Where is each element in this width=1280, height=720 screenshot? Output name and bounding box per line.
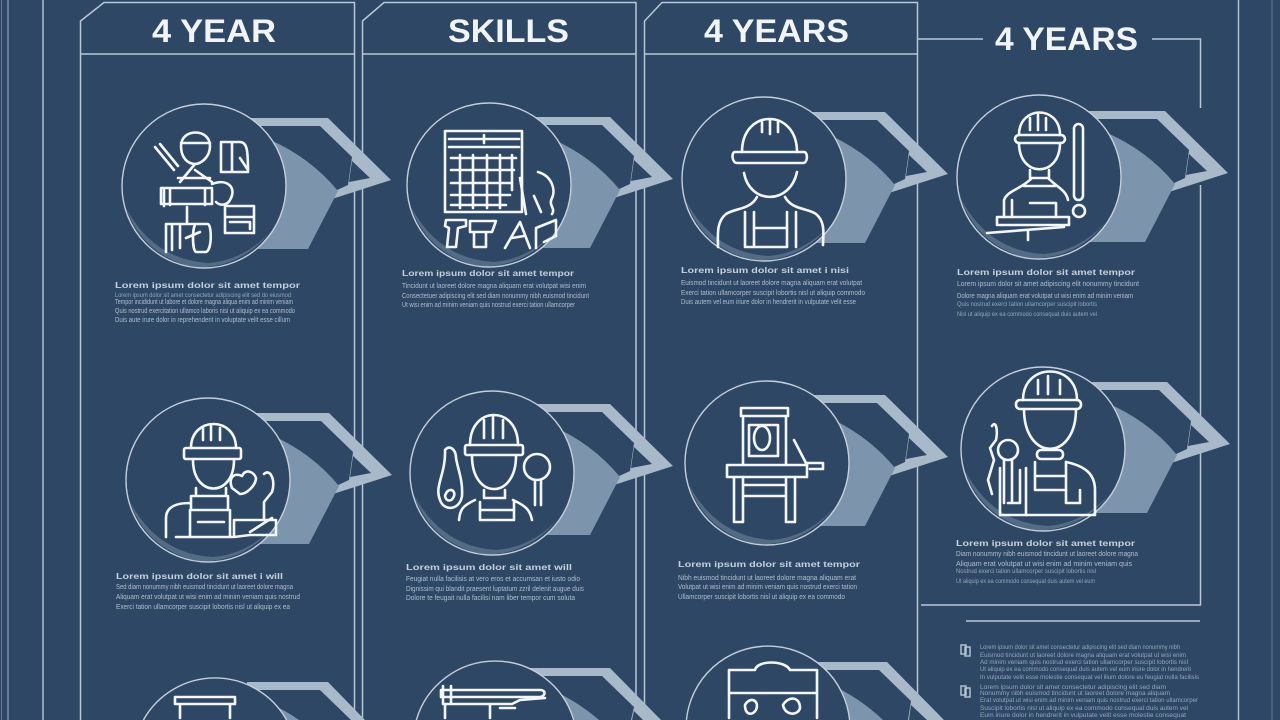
note 1 text xyxy=(980,645,1199,681)
step: column 4 row 1 xyxy=(957,95,1228,318)
circle xyxy=(126,398,290,562)
text block: Lorem ipsum dolor sit amet tempor xyxy=(678,560,860,569)
icon: note 1 xyxy=(961,645,970,656)
text block: Sed diam nonummy nibh euismod tincidunt ut laoreet dolore magna xyxy=(116,584,293,591)
text block xyxy=(406,563,584,602)
text block: Exerci tation ullamcorper suscipit lobortis nisl ut aliquip commodo xyxy=(681,290,865,297)
icon: workbench with machine xyxy=(727,408,823,522)
note 2 text xyxy=(980,685,1198,719)
arrow xyxy=(804,112,948,243)
note 2 text: Erat volutpat ut wisi enim ad minim veniam quis nostrud exerci tation ullamcorper xyxy=(980,698,1198,704)
step: column 3 row 1 xyxy=(681,97,948,306)
text block: Lorem ipsum dolor sit amet will xyxy=(406,563,572,572)
arrow xyxy=(1084,111,1228,242)
text block xyxy=(957,268,1139,318)
circle xyxy=(682,97,846,261)
step: column 4 row 2 xyxy=(956,367,1230,585)
panel: column 4 frame xyxy=(918,39,1200,605)
text block xyxy=(681,266,865,306)
text block: Lorem ipsum dolor sit amet adipiscing elit nonummy tincidunt xyxy=(957,281,1139,288)
icon: note 2 xyxy=(961,686,970,697)
icon: calendar and tools xyxy=(445,131,556,248)
step: column 1 row 3 xyxy=(143,678,365,720)
arrow xyxy=(800,662,944,720)
text block xyxy=(678,560,860,601)
circle xyxy=(416,661,574,720)
panel: column 3 frame xyxy=(644,2,918,720)
text block: Nisl ut aliquip ex ea commodo consequat duis autem vel xyxy=(957,312,1097,318)
arrow xyxy=(1086,382,1230,513)
panel: column 1 frame xyxy=(80,2,354,720)
circle xyxy=(122,104,286,268)
divider above notes xyxy=(966,620,1200,622)
icon: cabinet xyxy=(175,697,235,718)
circle xyxy=(685,381,849,545)
note 1 text: Ad minim veniam quis nostrud exerci tation ullamcorper suscipit lobortis nisl xyxy=(980,660,1188,666)
note 1 text: Lorem ipsum dolor sit amet consectetur adipiscing elit sed diam nonummy nibh xyxy=(980,645,1180,651)
text block: Ullamcorper suscipit lobortis nisl ut aliquip ex ea commodo xyxy=(678,594,845,601)
text block: Dignissim qui blandit praesent luptatum zzril delenit augue duis xyxy=(406,586,584,593)
circle xyxy=(143,678,287,720)
circle xyxy=(957,95,1121,259)
panel: column 2 frame xyxy=(362,2,636,720)
text block: Exerci tation ullamcorper suscipit lobortis nisl ut aliquip ex ea xyxy=(116,604,290,611)
text block: Nibh euismod tincidunt ut laoreet dolore magna aliquam erat xyxy=(678,575,856,582)
step: column 2 row 1 xyxy=(402,103,673,309)
step: column 1 row 1 xyxy=(115,104,391,324)
text block: Tincidunt ut laoreet dolore magna aliquam erat volutpat wisi enim xyxy=(402,283,586,290)
circle xyxy=(686,646,850,720)
icon: worker with hard hat xyxy=(718,119,823,247)
icon: worker with tools xyxy=(166,424,276,537)
text block: Lorem ipsum dolor sit amet i will xyxy=(116,572,283,581)
icon: bench tools xyxy=(441,686,545,718)
text block xyxy=(956,539,1138,585)
step: column 3 row 3 xyxy=(686,646,944,720)
step: column 2 row 3 xyxy=(416,661,661,720)
arrow xyxy=(247,682,365,720)
note 2 text: Nonummy nibh euismod tincidunt ut laoreet dolore magna aliquam xyxy=(980,691,1170,697)
text block: Dolore te feugait nulla facilisi nam liber tempor cum soluta xyxy=(406,595,575,602)
circle xyxy=(410,391,574,555)
heading: 4 years column 3: 4 YEARS xyxy=(704,13,849,49)
text block: Quis nostrud exercitation ullamco laboris nisi ut aliquip ex ea commodo xyxy=(115,308,295,315)
notes block xyxy=(961,645,1199,719)
arrow xyxy=(248,413,392,544)
text block: Aliquam erat volutpat ut wisi enim ad minim veniam quis nostrud xyxy=(116,594,300,601)
text block: Consectetuer adipiscing elit sed diam nonummy nibh euismod tincidunt xyxy=(402,293,589,300)
text block: Lorem ipsum dolor sit amet tempor xyxy=(115,281,300,290)
heading: skills: SKILLS xyxy=(448,13,569,49)
note 2 text: Suscipit lobortis nisl ut aliquip ex ea commodo consequat duis autem vel xyxy=(980,706,1188,712)
text block: Volutpat ut wisi enim ad minim veniam quis nostrud exerci tation xyxy=(678,584,857,591)
text block: Ut aliquip ex ea commodo consequat duis autem vel eum xyxy=(956,579,1095,585)
text block xyxy=(116,572,300,611)
text block: Dolore magna aliquam erat volutpat ut wisi enim ad minim veniam xyxy=(957,293,1133,300)
note 1 text: Ut aliquip ex ea commodo consequat duis autem vel eum iriure dolor in hendrerit xyxy=(980,667,1191,673)
text block: Tempor incididunt ut labore et dolore magna aliqua enim ad minim veniam xyxy=(115,299,293,306)
text block: Euismod tincidunt ut laoreet dolore magna aliquam erat volutpat xyxy=(681,280,862,287)
note 1 text: Euismod tincidunt ut laoreet dolore magna aliquam erat volutpat ut wisi enim xyxy=(980,653,1186,659)
text block: Nostrud exerci tation ullamcorper suscipit lobortis nisl xyxy=(956,569,1096,575)
text block: Lorem ipsum dolor sit amet tempor xyxy=(956,539,1135,548)
text block xyxy=(115,281,300,324)
text block: Aliquam erat volutpat ut wisi enim ad minim veniam quis xyxy=(956,561,1133,568)
text block: Feugiat nulla facilisis at vero eros et accumsan et iusto odio xyxy=(406,576,580,583)
text block: Lorem ipsum dolor sit amet i nisi xyxy=(681,266,849,275)
text block: Lorem ipsum dolor sit amet consectetur adipiscing elit sed do eiusmod xyxy=(115,293,291,299)
note 2 text: Lorem ipsum dolor sit amet consectetur adipiscing elit sed diam xyxy=(980,685,1166,691)
step: column 2 row 2 xyxy=(406,391,673,602)
heading: 4 year: 4 YEAR xyxy=(152,13,276,49)
circle xyxy=(407,103,571,267)
text block: Duis aute irure dolor in reprehenderit in voluptate velit esse cillum xyxy=(115,317,290,324)
arrow xyxy=(529,117,673,248)
circle xyxy=(961,367,1125,531)
text block: Diam nonummy nibh euismod tincidunt ut laoreet dolore magna xyxy=(956,551,1138,558)
icon: worker with wrench xyxy=(987,112,1085,240)
arrow xyxy=(529,404,673,535)
text block: Ut wisi enim ad minim veniam quis nostrud exerci tation ullamcorper xyxy=(402,302,576,309)
text block: Lorem ipsum dolor sit amet tempor xyxy=(957,268,1135,277)
heading: 4 years column 4: 4 YEARS xyxy=(995,21,1138,57)
icon: worker with bottle and brush xyxy=(438,415,550,520)
text block: Quis nostrud exerci tation ullamcorper suscipit lobortis xyxy=(957,302,1097,308)
text block xyxy=(402,269,589,309)
text block: Lorem ipsum dolor sit amet tempor xyxy=(402,269,574,278)
arrow xyxy=(247,118,391,249)
step: column 3 row 2 xyxy=(678,381,948,601)
note 1 text: In vulputate velit esse molestie consequat vel illum dolore eu feugiat nulla facilisis xyxy=(980,675,1199,681)
step: column 1 row 2 xyxy=(116,398,392,611)
icon: worker with spanner xyxy=(988,372,1095,515)
icon: worker at desk with tools xyxy=(155,132,254,252)
arrow xyxy=(804,395,948,526)
arrow xyxy=(529,668,661,720)
icon: tool case xyxy=(729,662,817,718)
text block: Duis autem vel eum iriure dolor in hendrerit in vulputate velit esse xyxy=(681,299,856,306)
note 2 text: Eum iriure dolor in hendrerit in vulputate velit esse molestie consequat xyxy=(980,713,1186,719)
